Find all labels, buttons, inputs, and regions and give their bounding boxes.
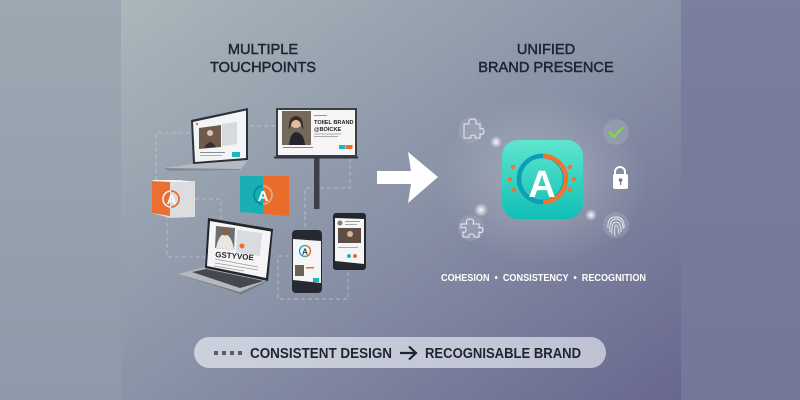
heading: multiple touchpoints: TOUCHPOINTS bbox=[210, 60, 316, 76]
arrow bbox=[377, 152, 438, 203]
heading: multiple touchpoints: MULTIPLE bbox=[228, 42, 298, 58]
icon: puzzle top bbox=[458, 117, 484, 143]
laptop bottom bbox=[178, 218, 273, 295]
billboard: TOIIEL BRAND bbox=[314, 120, 354, 126]
box left: A bbox=[167, 192, 177, 207]
heading: multiple touchpoints bbox=[210, 42, 316, 76]
heading: unified brand presence bbox=[478, 42, 614, 76]
icon: check bbox=[603, 119, 629, 145]
heading: unified brand presence: UNIFIED bbox=[517, 42, 575, 58]
laptop bottom: GSTYVOE bbox=[215, 250, 255, 262]
tablet bbox=[333, 213, 366, 270]
app icon: A bbox=[528, 164, 556, 206]
icon: puzzle bottom bbox=[458, 215, 484, 241]
pill: consistent design to recognisable brand: CONSISTENT DESIGN bbox=[250, 346, 392, 362]
pill: consistent design to recognisable brand bbox=[194, 337, 606, 368]
phone: A bbox=[302, 248, 308, 256]
heading: unified brand presence: BRAND PRESENCE bbox=[478, 60, 614, 76]
billboard: @BOICKE bbox=[314, 127, 341, 133]
dashed connectors bbox=[156, 126, 350, 299]
box left bbox=[152, 180, 195, 218]
sparkles bbox=[474, 136, 597, 221]
pill squares bbox=[214, 351, 242, 355]
icon: fingerprint bbox=[603, 212, 629, 238]
laptop top bbox=[163, 108, 248, 171]
app icon bbox=[502, 140, 583, 219]
pill: consistent design to recognisable brand: RECOGNISABLE BRAND bbox=[425, 346, 581, 362]
pill arrow bbox=[400, 346, 416, 360]
phone bbox=[292, 230, 322, 293]
tagline: COHESION • CONSISTENCY • RECOGNITION bbox=[441, 273, 646, 284]
icon: lock bbox=[613, 167, 628, 189]
box right: A bbox=[258, 188, 269, 205]
billboard bbox=[274, 108, 358, 209]
box right bbox=[240, 176, 289, 216]
